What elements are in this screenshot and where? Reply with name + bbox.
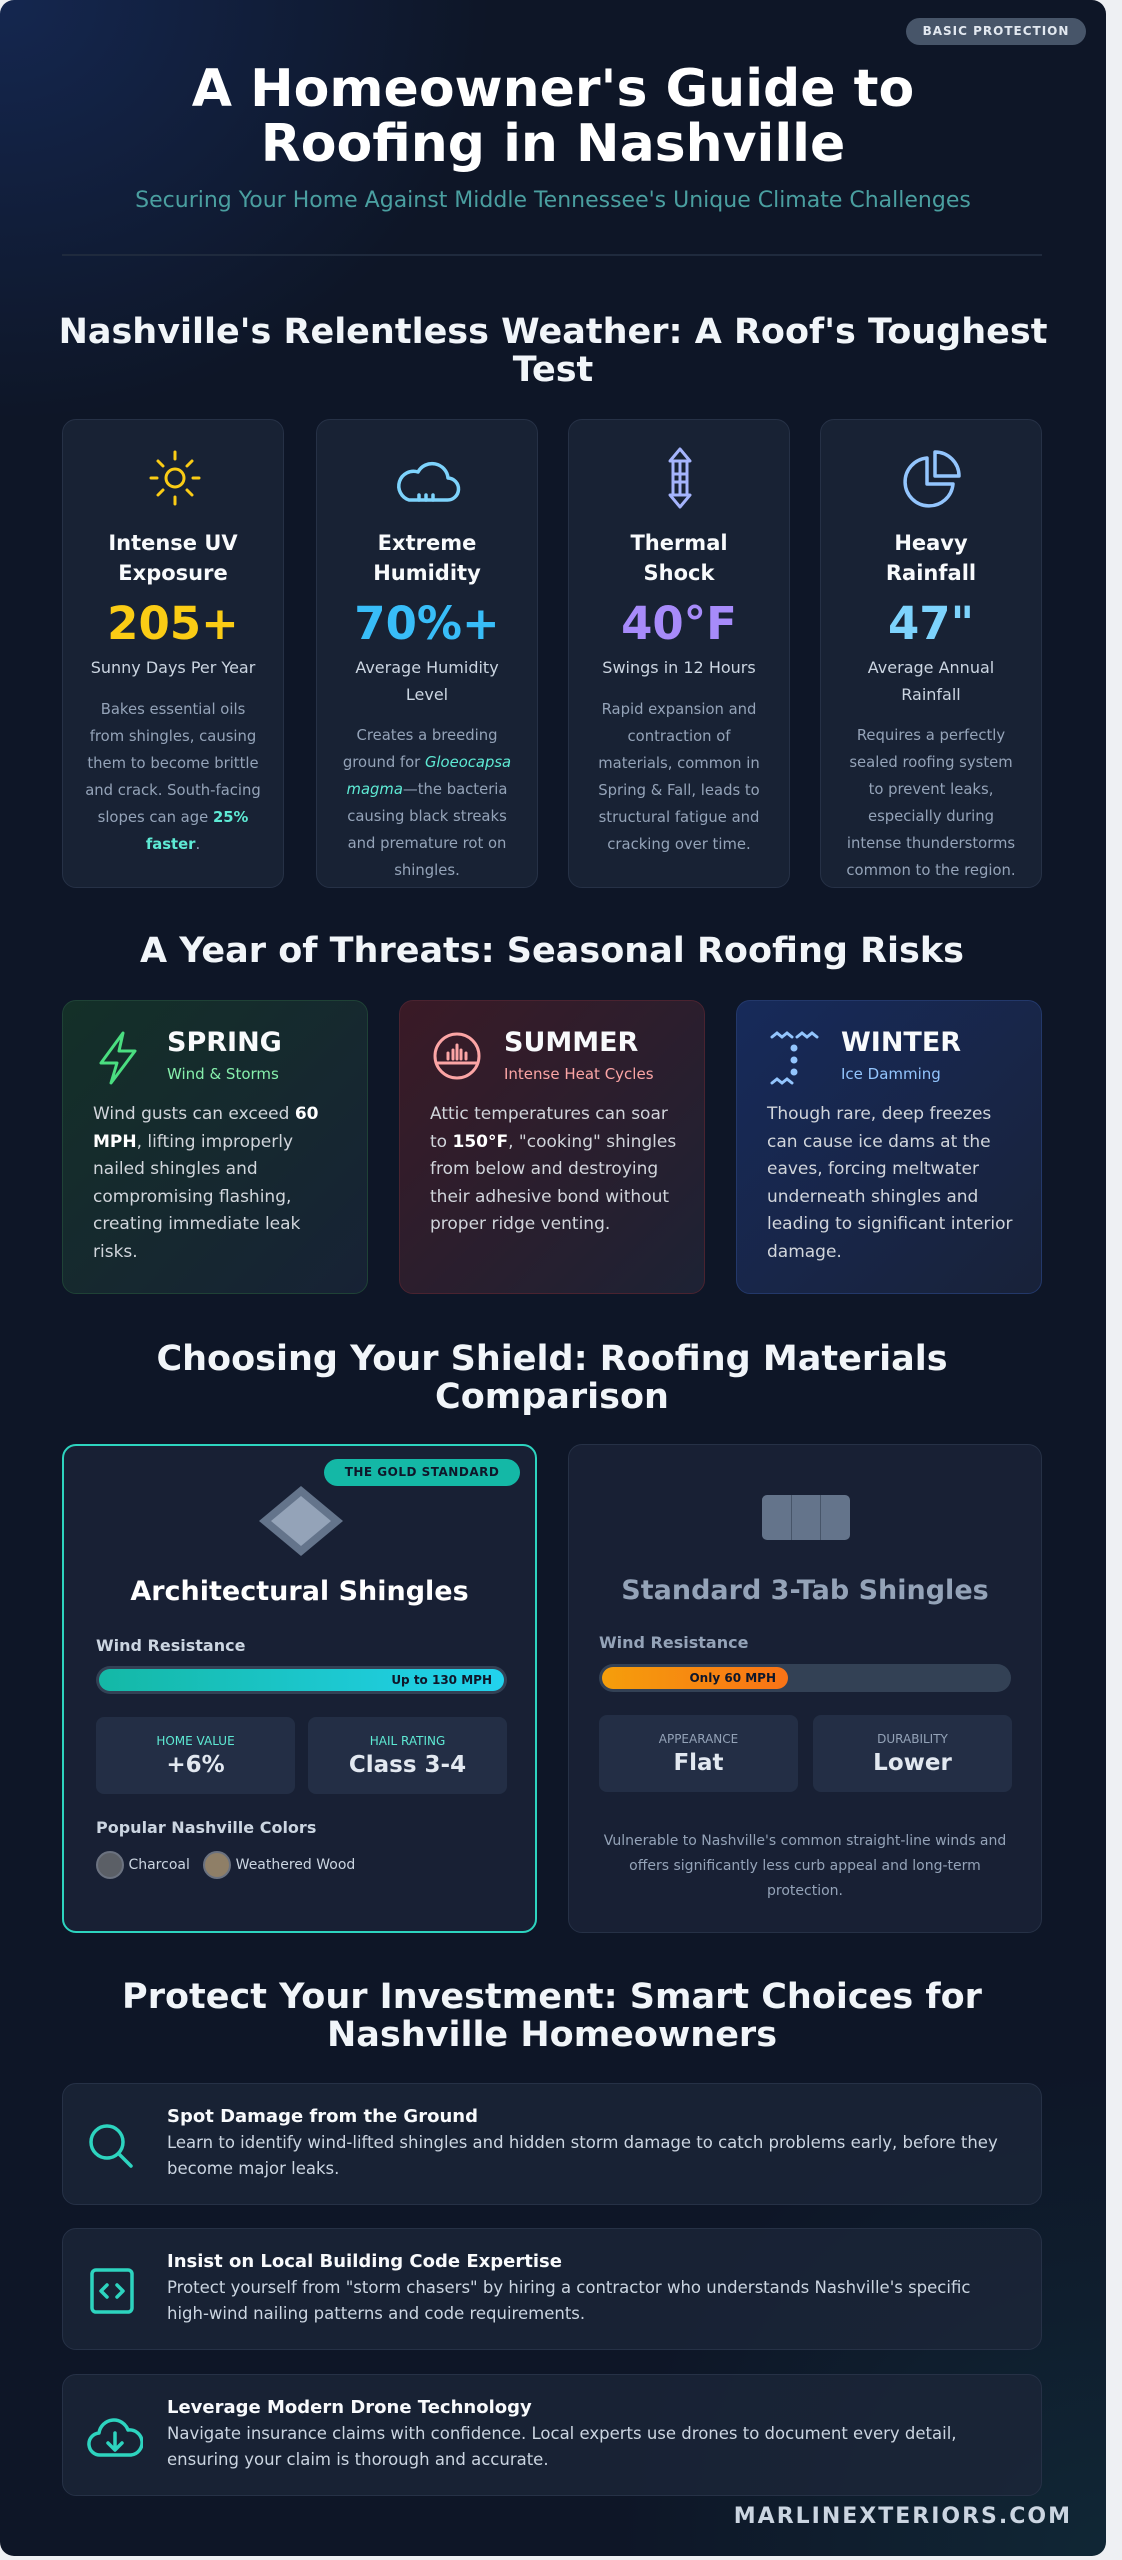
card: 3-tab shingles [568,1444,1042,1933]
tip: building code: Protect yourself from "storm chasers" by hiring a contractor who understands Nashville's specific high-wind nailing patterns and code requirements. [167,2278,970,2323]
card: humidity: 70%+ [354,597,500,650]
icon: heat dial [434,1032,480,1080]
card: 3-tab shingles: Wind Resistance [599,1633,748,1652]
card: spring: Wind gusts can exceed 60 MPH, lifting improperly nailed shingles and compromising flashing, creating immediate leak risks. [93,1104,318,1262]
text: vulnerability note: Vulnerable to Nashville's common straight-line winds and offers significantly less curb appeal and long-term protection. [604,1833,1006,1899]
icon: cloud download [87,2418,143,2457]
card: 3-tab shingles: Standard 3-Tab Shingles [621,1575,989,1606]
card: thermal: Rapid expansion and contraction of materials, common in Spring & Fall, leads to structural fatigue and cracking over time. [598,701,760,853]
title: A Homeowner's Guide to [192,59,914,119]
icon: 3-tab [762,1495,850,1540]
stat: appearance: Flat [673,1750,724,1776]
card: summer [399,1000,705,1294]
card: UV: Exposure [118,561,228,585]
card: architectural shingles: Architectural Shingles [130,1576,469,1607]
badge: basic protection [906,18,1086,45]
tip: spot damage: Spot Damage from the Ground [167,2106,478,2127]
stat: hail rating: HAIL RATING [370,1734,445,1748]
heading: seasonal: A Year of Threats: Seasonal Roofing Risks [140,931,964,971]
card: summer: Attic temperatures can soar to 150°F, "cooking" shingles from below and destroying their adhesive bond without proper ridge venting. [430,1104,676,1234]
icon: ice waves [770,1031,819,1085]
badge: gold standard [324,1459,520,1486]
stat: hail rating: Class 3-4 [349,1752,466,1778]
card: architectural shingles: Wind Resistance [96,1636,245,1655]
card: spring: SPRING [167,1027,282,1058]
card: UV: 205+ [107,597,239,650]
bar: wind 60 [599,1664,1011,1692]
stat: durability [813,1715,1012,1792]
card: rainfall [820,419,1042,888]
card: thermal: 40°F [621,597,737,650]
card: rainfall: Heavy [894,531,968,555]
card: winter: Ice Damming [841,1065,941,1083]
icon: lightning [99,1032,137,1084]
card: UV: Bakes essential oils from shingles, causing them to become brittle and crack. South-facing slopes can age 25% faster. [85,701,261,853]
badge: gold standard: THE GOLD STANDARD [345,1465,499,1479]
panel: weather stats [62,419,1042,888]
badge: basic protection: BASIC PROTECTION [923,24,1069,38]
bar: wind 60: Only 60 MPH [689,1671,776,1685]
card: humidity: Average Humidity Level [355,658,499,704]
bar: wind 130 [96,1666,507,1694]
stat: hail rating [308,1717,507,1794]
card: rainfall: Requires a perfectly sealed roofing system to prevent leaks, especially during intense thunderstorms common to the region. [846,727,1016,879]
card: humidity: Extreme [378,531,476,555]
subtitle: Securing Your Home Against Middle Tennessee's Unique Climate Challenges [135,188,971,213]
icon: code box [90,2268,134,2314]
icon: pie chart [903,450,961,508]
card: thermal: Swings in 12 Hours [602,658,756,677]
card: humidity: Humidity [373,561,481,585]
footer: website: MARLINEXTERIORS.COM [734,2504,1072,2529]
card: UV [62,419,284,888]
card: UV: Sunny Days Per Year [91,658,255,677]
card: UV: Intense UV [108,531,238,555]
card: thermal: Shock [644,561,714,585]
card: humidity [316,419,538,888]
icon: thermal arrows [668,447,692,509]
card: winter: WINTER [841,1027,961,1058]
heading: protect: Protect Your Investment: Smart Choices for Nashville Homeowners [122,1977,982,2055]
icon: magnifier [89,2124,133,2168]
tip: spot damage: Learn to identify wind-lifted shingles and hidden storm damage to catch problems early, before they become major leaks. [167,2133,998,2178]
card: thermal [568,419,790,888]
card: rainfall: Rainfall [886,561,976,585]
title [192,59,914,174]
stat: appearance: APPEARANCE [659,1732,738,1746]
heading: materials: Choosing Your Shield: Roofing Materials Comparison [156,1339,948,1417]
icon: sun [150,450,200,506]
tip: drones [62,2374,1042,2496]
card: architectural shingles [62,1444,537,1933]
stat: appearance [599,1715,798,1792]
stat: durability: DURABILITY [877,1732,948,1746]
stat: home value: +6% [166,1752,225,1778]
card: spring: Wind & Storms [167,1065,279,1083]
card: thermal: Thermal [630,531,728,555]
tip: drones: Leverage Modern Drone Technology [167,2397,532,2418]
heading: weather: Nashville's Relentless Weather: A Roof's Toughest Test [59,312,1047,390]
card: rainfall: Average Annual Rainfall [868,658,994,704]
card: summer: SUMMER [504,1027,638,1058]
icon: cloud [397,462,460,502]
card: rainfall: 47" [888,597,974,650]
card: summer: Intense Heat Cycles [504,1065,654,1083]
tip: spot damage [62,2083,1042,2205]
title: Roofing in Nashville [261,114,845,174]
card: winter: Though rare, deep freezes can cause ice dams at the eaves, forcing meltwater underneath shingles and leading to significant interior damage. [767,1104,1012,1262]
card: spring [62,1000,368,1294]
icon: diamond [259,1486,343,1556]
stat: home value: HOME VALUE [156,1734,235,1748]
stat: home value [96,1717,295,1794]
tip: building code: Insist on Local Building Code Expertise [167,2251,562,2272]
card: winter [736,1000,1042,1294]
bar: wind 130: Up to 130 MPH [391,1673,492,1687]
stat: durability: Lower [873,1750,952,1776]
tip: drones: Navigate insurance claims with confidence. Local experts use drones to document every detail, ensuring your claim is thorough and accurate. [167,2424,957,2469]
card: architectural shingles: Popular Nashville Colors [96,1818,316,1837]
card: humidity: Creates a breeding ground for Gloeocapsa magma—the bacteria causing black streaks and premature rot on shingles. [343,727,511,879]
swatches [96,1851,355,1879]
swatches: Charcoal Weathered Wood [128,1857,355,1873]
tip: building code [62,2228,1042,2350]
